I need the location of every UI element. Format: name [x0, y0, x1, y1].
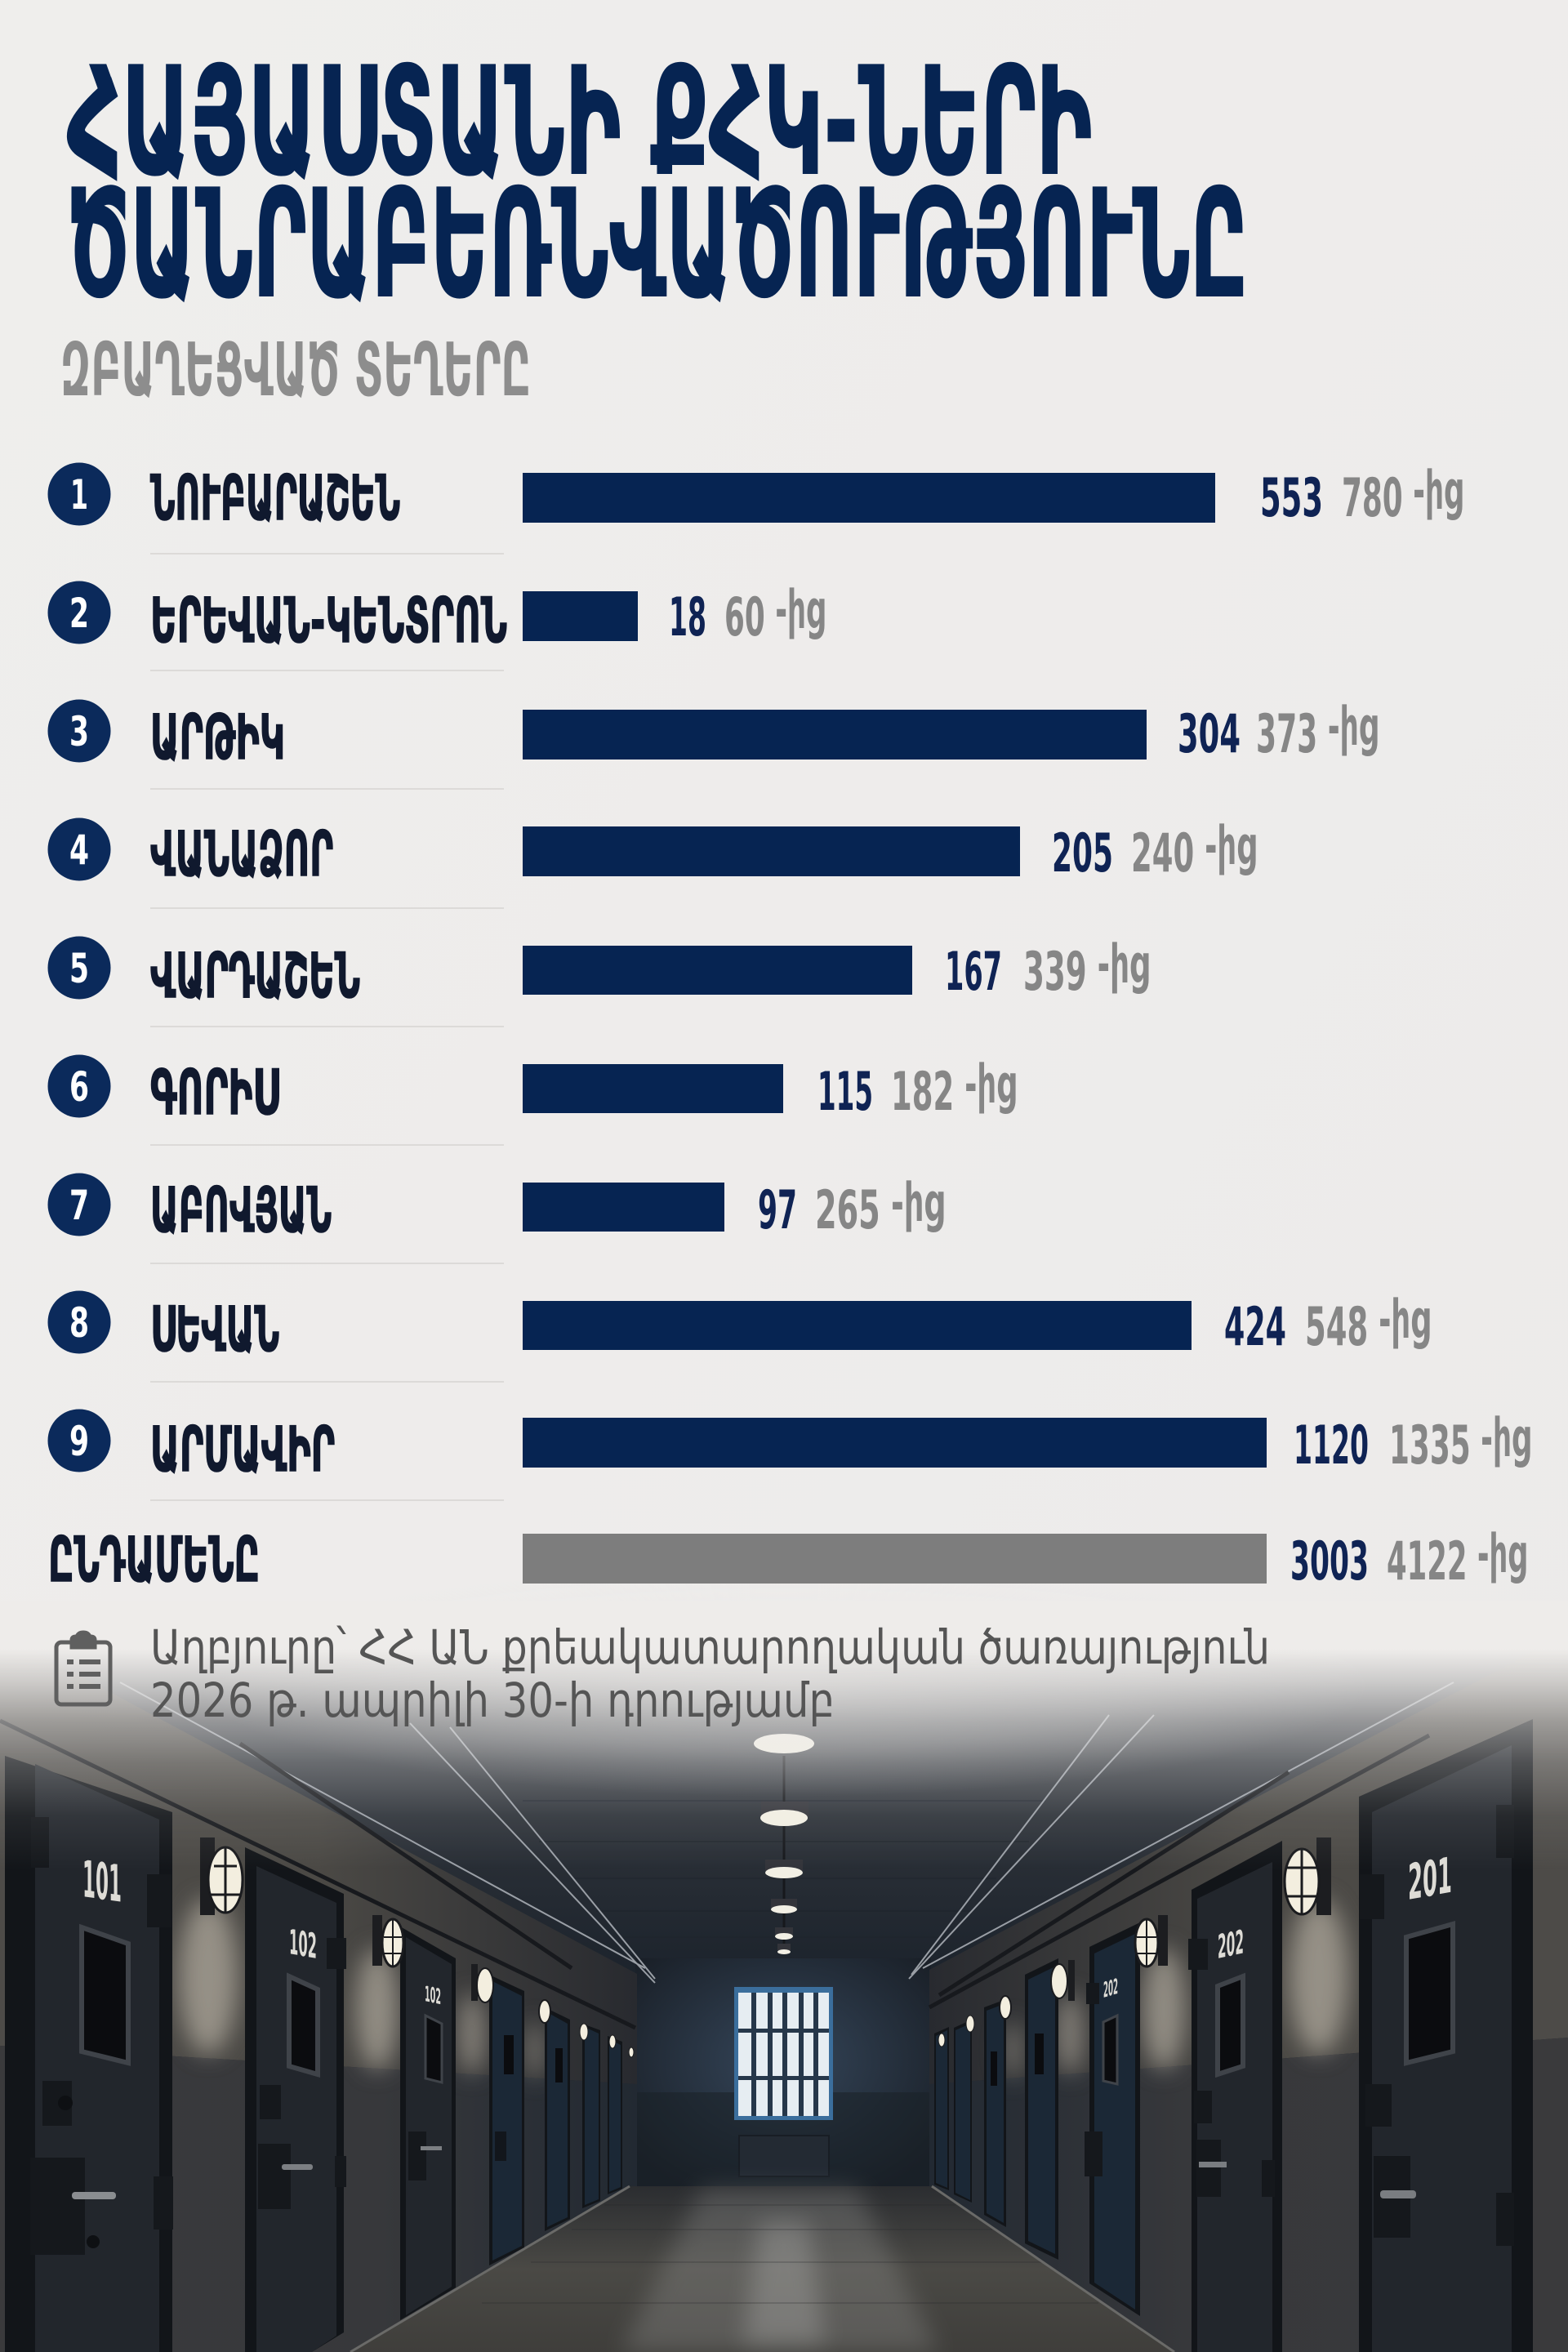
bar: [523, 1301, 1192, 1350]
label: ԳՈՐԻՍ: [150, 1056, 279, 1129]
value: 97: [758, 1180, 797, 1241]
value: [1052, 816, 1256, 884]
icon: clipboard: [56, 1633, 110, 1704]
corridor ceiling: [0, 1633, 1568, 1974]
bar: [523, 710, 1147, 760]
barred window: [734, 1987, 833, 2120]
bar: [523, 1064, 783, 1113]
source note: 2026 թ. ապրիլի 30-ի դրությամբ: [150, 1673, 835, 1728]
rank badge 1: [47, 462, 111, 526]
row total: [48, 1523, 1526, 1596]
value: -ից: [964, 1054, 1016, 1116]
value: [758, 1173, 944, 1241]
rank badge 1: 1: [70, 471, 88, 519]
value: 304: [1178, 704, 1241, 765]
door 202: [1188, 1841, 1282, 2352]
rank badge 8: 8: [69, 1299, 89, 1347]
value: 553: [1260, 468, 1323, 529]
back wall: [635, 1958, 931, 2186]
value: 60: [724, 587, 798, 648]
door 203: [1085, 1922, 1140, 2316]
label: ԱՐԹԻԿ: [150, 701, 285, 773]
label: ՎԱՐԴԱՇԵՆ: [150, 939, 360, 1012]
value: 115: [817, 1062, 873, 1123]
row 9: Armavir: [47, 1408, 1530, 1500]
value: -ից: [1477, 1524, 1526, 1585]
value: 18: [669, 587, 706, 648]
value: 1335: [1389, 1415, 1537, 1477]
rank badge 3: [47, 699, 111, 763]
bar: [523, 1534, 1267, 1584]
value: [1294, 1408, 1530, 1477]
value: [945, 934, 1149, 1003]
lamp glow on walls: [179, 1899, 1348, 2079]
value: -ից: [1413, 461, 1463, 522]
value: [817, 1054, 1016, 1123]
rank badge 8: [47, 1290, 111, 1354]
door 202: 202: [1218, 1922, 1244, 1967]
door 102: [245, 1847, 346, 2352]
value: 548: [1305, 1297, 1416, 1358]
rank badge 6: [47, 1055, 111, 1117]
value: 182: [891, 1062, 1002, 1123]
rank badge 6: 6: [69, 1063, 89, 1111]
value: [669, 580, 825, 648]
radiator: [739, 2136, 829, 2176]
door 201: 201: [1408, 1847, 1452, 1912]
rank badge 5: [47, 936, 111, 1000]
value: [1290, 1524, 1526, 1592]
label: ԱՐՄԱՎԻՐ: [150, 1413, 335, 1486]
value: -ից: [1328, 697, 1378, 758]
bar: [523, 946, 912, 995]
bar: [523, 591, 638, 641]
door 201: [1359, 1719, 1533, 2352]
value: 205: [1052, 823, 1113, 884]
value: 373: [1256, 704, 1367, 765]
rank badge 7: [47, 1173, 111, 1236]
rank badge 3: 3: [69, 708, 89, 755]
door 102: 102: [289, 1922, 317, 1967]
row 4: Vanadzor: [47, 816, 1256, 908]
rank badge 5: 5: [69, 945, 89, 992]
value: 780: [1342, 468, 1453, 529]
door 103: [400, 1927, 456, 2320]
bar: [523, 1183, 724, 1232]
value: 339: [1023, 942, 1134, 1003]
label: ԱԲՈՎՅԱՆ: [150, 1174, 332, 1246]
rank badge 9: 9: [69, 1418, 89, 1465]
value: [1224, 1290, 1430, 1358]
far doors: [489, 1975, 622, 2265]
row 3: Artik: [47, 697, 1378, 789]
label: ԸՆԴԱՄԵՆԸ: [48, 1523, 260, 1596]
value: 167: [945, 942, 1002, 1003]
rank badge 7: 7: [69, 1182, 89, 1229]
bar: [523, 473, 1215, 523]
value: 1120: [1294, 1415, 1369, 1477]
value: -ից: [1205, 816, 1256, 877]
door 103: 102: [425, 1982, 441, 2010]
title: [67, 35, 1248, 331]
door 101: [5, 1756, 173, 2352]
right cell doors: [934, 1719, 1533, 2352]
left cell doors: [5, 1756, 622, 2352]
value: 240: [1131, 823, 1242, 884]
label: ԵՐԵՎԱՆ-ԿԵՆՏՐՈՆ: [150, 584, 507, 657]
value: 4122: [1387, 1531, 1535, 1592]
value: 265: [815, 1180, 926, 1241]
label: ՍԵՎԱՆ: [150, 1293, 279, 1365]
bar chart: occupied places by penitentiary: [47, 461, 1530, 1596]
label: ՎԱՆԱՁՈՐ: [150, 817, 333, 890]
door 101: 101: [82, 1849, 122, 1914]
value: 3003: [1290, 1531, 1369, 1592]
value: -ից: [1379, 1290, 1430, 1351]
value: 424: [1224, 1297, 1286, 1358]
far doors: [934, 1958, 1058, 2260]
wall lamps: [200, 1838, 1331, 2057]
value: -ից: [1098, 934, 1149, 996]
row 7: Abovyan: [47, 1173, 944, 1263]
value: -ից: [775, 580, 825, 641]
door 203: 202: [1103, 1974, 1118, 2003]
source note: [150, 1619, 1270, 1728]
bar: [523, 1418, 1267, 1468]
row 6: Goris: [47, 1054, 1016, 1145]
rank badge 4: [47, 818, 111, 880]
background photo: prison corridor: [0, 1568, 1568, 2352]
row 1: Nubarashen: [47, 461, 1463, 554]
source note: Աղբյուրը՝ ՀՀ ԱՆ քրեակատարողական ծառայություն: [150, 1619, 1270, 1675]
row 8: Sevan: [47, 1290, 1430, 1382]
fade into page background: [0, 1568, 1568, 1870]
label: ՆՈՒԲԱՐԱՇԵՆ: [150, 461, 400, 534]
bar: [523, 826, 1020, 876]
rank badge 2: [47, 581, 111, 644]
value: [1260, 461, 1463, 529]
rank badge 9: [47, 1410, 111, 1472]
floor: [350, 2186, 1174, 2352]
value: [1178, 697, 1378, 765]
ceiling and wall pipes: [0, 1682, 1454, 2028]
ceiling lights: [754, 1734, 814, 1954]
rank badge 4: 4: [69, 826, 89, 874]
right wall: [929, 1633, 1568, 2352]
row 5: Vardashen: [47, 934, 1149, 1027]
left wall: [0, 1633, 637, 2352]
row 2: Yerevan-Kentron: [47, 580, 825, 670]
rank badge 2: 2: [69, 590, 89, 637]
value: -ից: [891, 1173, 944, 1234]
subtitle: ԶԲԱՂԵՑՎԱԾ ՏԵՂԵՐԸ: [60, 327, 531, 413]
